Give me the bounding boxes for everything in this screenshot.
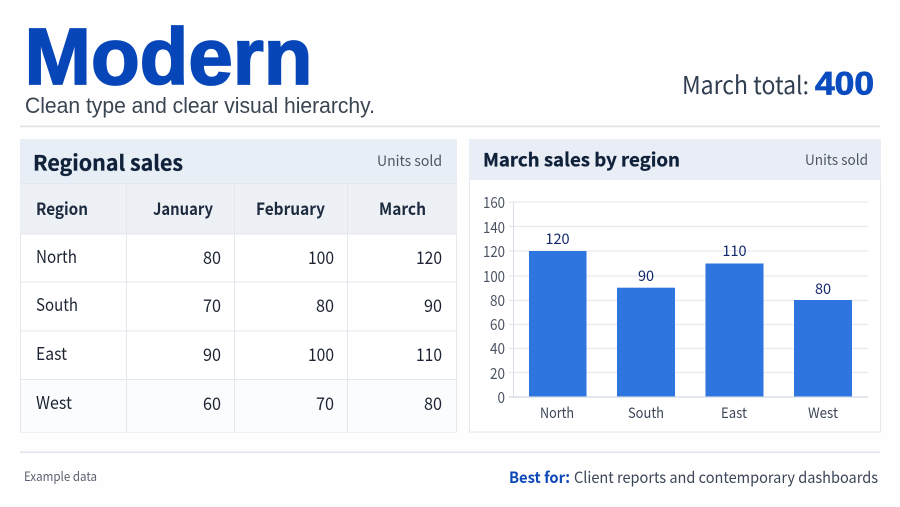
table heading: Regional sales (33, 148, 183, 178)
subtitle: Clean type and clear visual hierarchy. (25, 93, 375, 118)
chart heading: March sales by region (483, 146, 680, 172)
row: West (36, 390, 442, 416)
March total callout (682, 66, 874, 102)
x axis labels: South (628, 402, 664, 423)
value labels: 80 (815, 278, 831, 299)
y axis labels: 40 (490, 337, 505, 359)
bars (529, 251, 852, 397)
value labels: 90 (638, 265, 654, 286)
y axis labels: 60 (490, 313, 505, 335)
bar chart (483, 191, 868, 423)
x axis labels: North (540, 402, 574, 423)
row: South: 90 (424, 293, 442, 318)
row: East: 90 (203, 342, 221, 367)
table header row: February (256, 195, 325, 220)
row: West: 60 (203, 391, 221, 416)
y axis labels: 20 (490, 362, 505, 384)
title: Modern (24, 12, 312, 101)
row: North: 80 (203, 245, 221, 270)
best for note: Client reports and contemporary dashboards (574, 466, 878, 488)
y axis labels: 160 (483, 191, 505, 213)
March total callout: March total: (682, 67, 809, 102)
panel: regional sales table (20, 139, 457, 432)
value labels (545, 228, 831, 299)
row: West: West (36, 390, 72, 415)
row: East: East (36, 341, 67, 366)
row: East (36, 341, 442, 367)
x axis labels: West (808, 402, 838, 423)
table header row: January (153, 195, 213, 220)
table header row: March (379, 195, 426, 220)
row: South: South (36, 292, 78, 317)
row: North: North (36, 244, 77, 269)
table header row (20, 184, 457, 234)
panel: March sales chart (469, 139, 881, 432)
y axis labels: 100 (483, 265, 505, 287)
row: North: 120 (416, 245, 442, 270)
y axis labels: 0 (498, 386, 505, 408)
March total callout: 400 (815, 66, 874, 102)
row: North (36, 244, 442, 270)
chart unit label: Units sold (805, 149, 868, 170)
x axis labels: East (721, 402, 747, 423)
y axis labels: 80 (490, 289, 505, 311)
y axis labels (483, 191, 505, 408)
row: East: 100 (308, 342, 334, 367)
value labels: 110 (722, 240, 747, 261)
row: West: 70 (316, 391, 334, 416)
table header row: Region (36, 195, 88, 220)
best for note: Best for: (509, 466, 570, 488)
row: East: 110 (416, 342, 442, 367)
table unit label: Units sold (377, 150, 442, 171)
row: South (36, 292, 442, 318)
row: North: 100 (308, 245, 334, 270)
y axis labels: 120 (483, 240, 505, 262)
row: South: 80 (316, 293, 334, 318)
x axis labels (540, 402, 838, 423)
row: West: 80 (424, 391, 442, 416)
footnote: Example data (24, 466, 97, 485)
value labels: 120 (545, 228, 570, 249)
row: South: 70 (203, 293, 221, 318)
y axis labels: 140 (483, 216, 505, 238)
